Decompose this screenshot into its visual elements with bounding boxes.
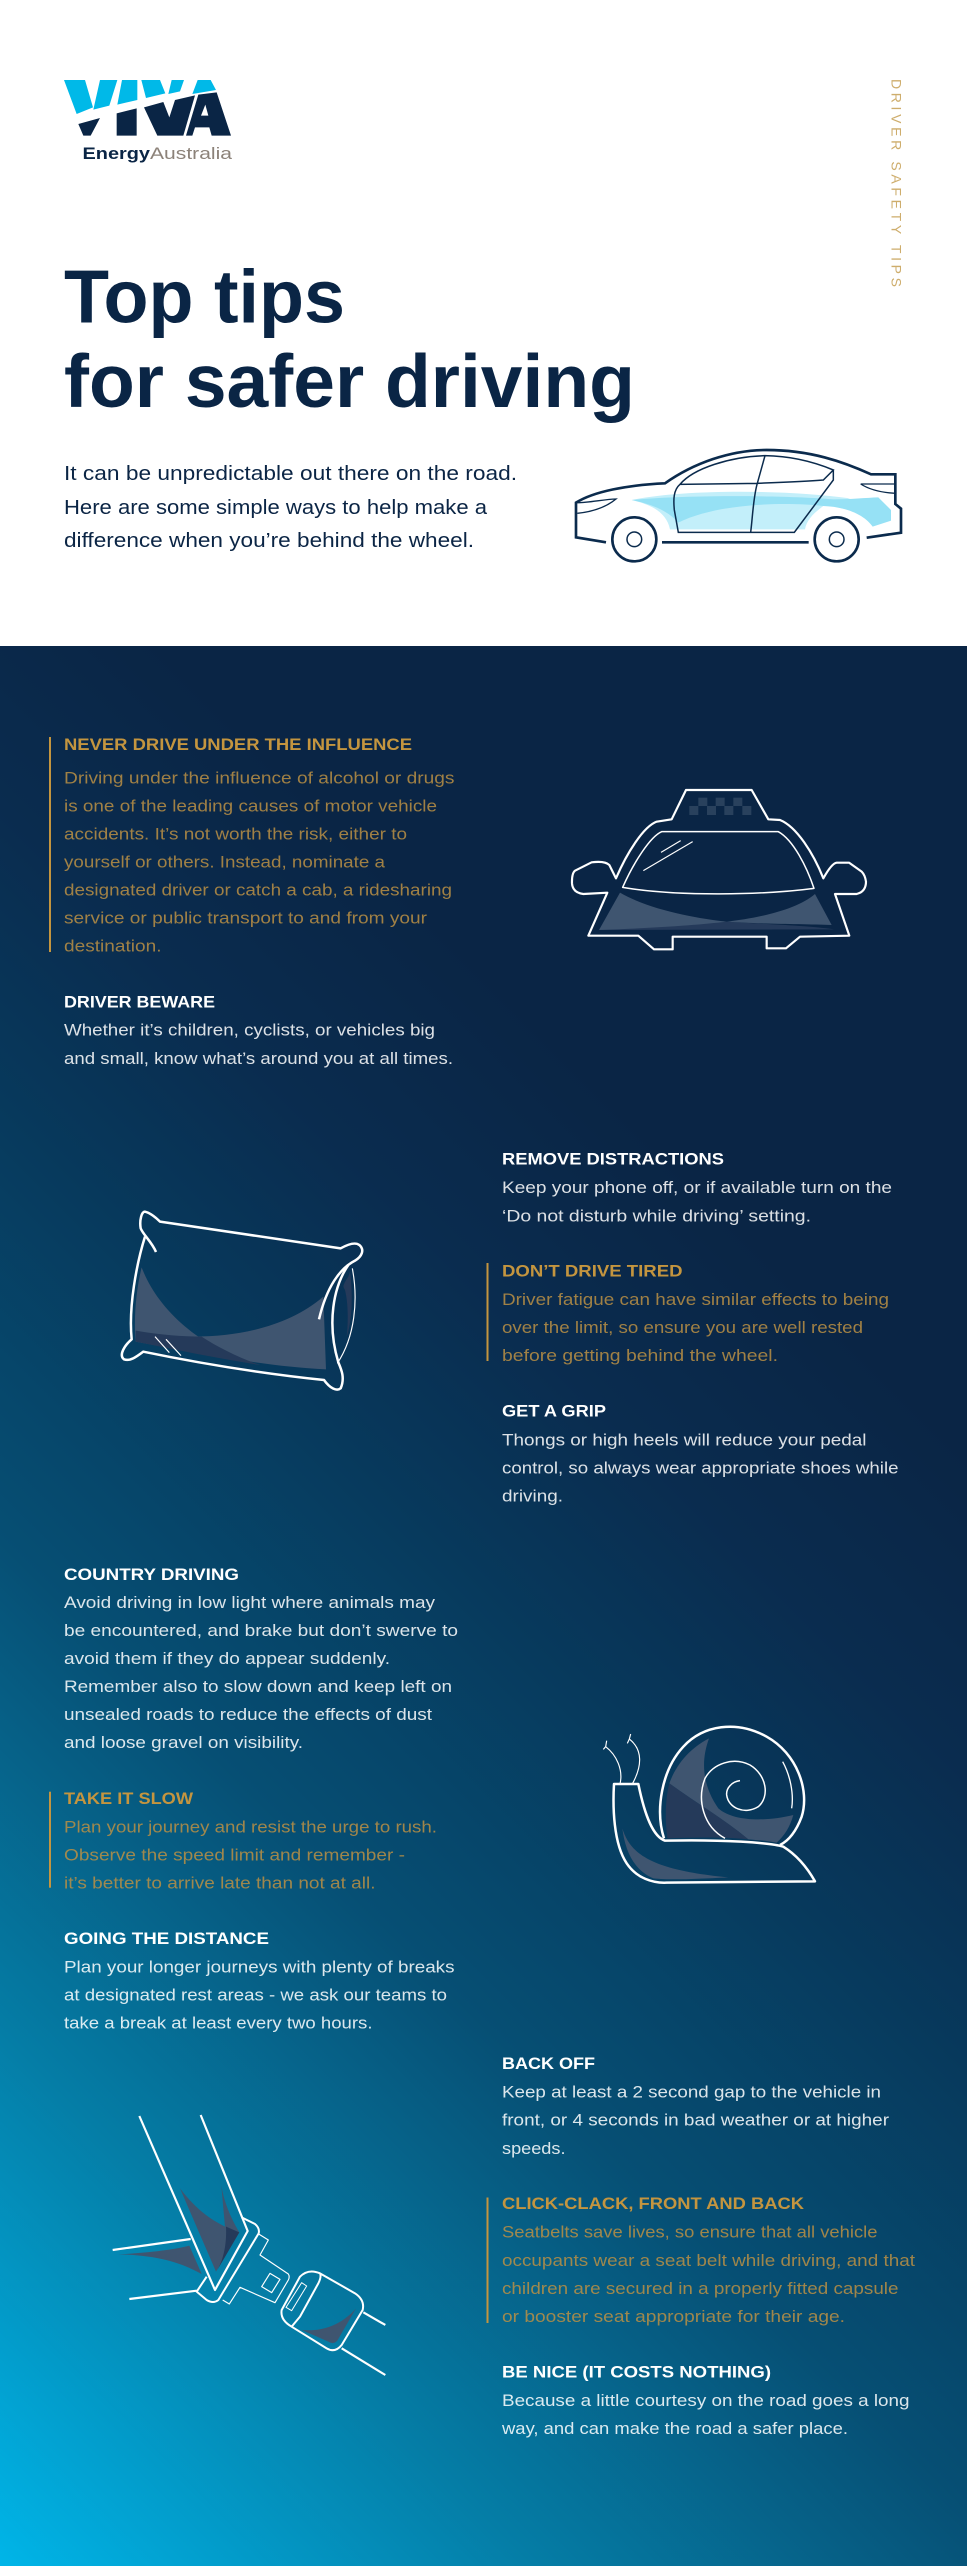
tip: click-clack, front and back: occupants wear a seat belt while driving, and that [502, 2251, 915, 2270]
tip: back off [502, 2054, 889, 2158]
icon: seatbelt [113, 2115, 385, 2375]
icon: pillow [122, 1212, 362, 1390]
tip: going the distance: Plan your longer journeys with plenty of breaks [64, 1958, 454, 1977]
tip: click-clack, front and back: children are secured in a properly fitted capsule [502, 2279, 898, 2298]
tip: remove distractions [502, 1149, 892, 1225]
icon: taxi [572, 790, 866, 949]
tip: take it slow: it’s better to arrive late than not at all. [64, 1874, 376, 1893]
tip: take it slow: Observe the speed limit and remember - [64, 1846, 405, 1865]
tip: get a grip [502, 1402, 898, 1505]
tip: going the distance: at designated rest areas - we ask our teams to [64, 1986, 447, 2005]
tip: driver beware: and small, know what’s around you at all times. [64, 1049, 453, 1068]
panel: white header [0, 0, 967, 646]
tip: country driving: unsealed roads to reduce the effects of dust [64, 1705, 432, 1724]
tip: driver beware: Whether it’s children, cyclists, or vehicles big [64, 1021, 435, 1040]
tip: click-clack, front and back: or booster seat appropriate for their age. [502, 2307, 845, 2326]
tip: don't drive tired: before getting behind the wheel. [502, 1346, 778, 1365]
tip: country driving: Avoid driving in low light where animals may [64, 1593, 436, 1612]
tip: country driving: be encountered, and brake but don’t swerve to [64, 1621, 458, 1640]
tip: remove distractions: Keep your phone off, or if available turn on the [502, 1178, 892, 1197]
tip: never drive under the influence: designated driver or catch a cab, a ridesharing [64, 880, 452, 899]
tip: going the distance: take a break at least every two hours. [64, 2014, 372, 2033]
tip: never drive under the influence [49, 735, 454, 956]
logo: Viva Energy Australia: Australia [150, 144, 233, 163]
title [64, 254, 635, 423]
tip: be nice [501, 2363, 910, 2438]
tip: never drive under the influence: accidents. It’s not worth the risk, either to [64, 824, 407, 843]
tip: never drive under the influence: NEVER DRIVE UNDER THE INFLUENCE [64, 735, 412, 754]
icon: snail [603, 1727, 815, 1883]
tip: never drive under the influence: Driving under the influence of alcohol or drugs [64, 768, 454, 787]
title: for safer driving [64, 339, 635, 423]
tip: click-clack, front and back: Seatbelts save lives, so ensure that all vehicle [502, 2222, 878, 2242]
tip: back off: Keep at least a 2 second gap to the vehicle in [502, 2082, 881, 2101]
tip: remove distractions: ‘Do not disturb while driving’ setting. [502, 1206, 811, 1225]
tip: never drive under the influence: service or public transport to and from your [64, 908, 427, 927]
tip: country driving: Remember also to slow down and keep left on [64, 1677, 452, 1696]
tip: get a grip: control, so always wear appropriate shoes while [502, 1458, 898, 1477]
tip: take it slow [49, 1789, 437, 1893]
panel: gradient tips background [0, 646, 967, 2566]
tip: going the distance [64, 1929, 454, 2033]
tip: never drive under the influence: yourself or others. Instead, nominate a [64, 852, 386, 871]
tip: back off: speeds. [502, 2139, 566, 2158]
tip: get a grip: GET A GRIP [502, 1402, 606, 1421]
logo: Viva Energy Australia [64, 80, 233, 163]
tip: remove distractions: REMOVE DISTRACTIONS [502, 1149, 724, 1168]
intro text: It can be unpredictable out there on the road. [64, 463, 517, 485]
tip: take it slow: Plan your journey and resist the urge to rush. [64, 1818, 437, 1837]
tip: don't drive tired [486, 1262, 889, 1365]
tip: get a grip: Thongs or high heels will reduce your pedal [502, 1430, 866, 1449]
tip: click-clack, front and back [486, 2194, 915, 2326]
vertical label: driver safety tips: DRIVER SAFETY TIPS [888, 79, 904, 287]
tip: be nice: BE NICE (IT COSTS NOTHING) [502, 2363, 771, 2382]
tip: country driving: COUNTRY DRIVING [64, 1565, 239, 1584]
logo: Viva Energy Australia: Energy [82, 144, 151, 163]
tip: be nice: way, and can make the road a safer place. [501, 2419, 848, 2438]
tip: country driving: and loose gravel on visibility. [64, 1733, 303, 1752]
tip: get a grip: driving. [502, 1486, 563, 1505]
tip: click-clack, front and back: CLICK-CLACK, FRONT AND BACK [502, 2194, 805, 2213]
intro text [64, 463, 517, 552]
title: Top tips [64, 254, 345, 338]
tip: take it slow: TAKE IT SLOW [64, 1789, 194, 1808]
tip: never drive under the influence: is one of the leading causes of motor vehicle [64, 796, 437, 815]
tip: country driving: avoid them if they do appear suddenly. [64, 1649, 390, 1668]
tip: don't drive tired: over the limit, so ensure you are well rested [502, 1318, 863, 1337]
tip: be nice: Because a little courtesy on the road goes a long [502, 2391, 910, 2410]
tip: don't drive tired: DON’T DRIVE TIRED [502, 1262, 682, 1281]
tip: never drive under the influence: destination. [64, 937, 162, 956]
tip: driver beware [64, 992, 453, 1068]
tip: back off: BACK OFF [502, 2054, 595, 2073]
intro text: difference when you’re behind the wheel. [64, 530, 474, 552]
tip: driver beware: DRIVER BEWARE [64, 992, 215, 1011]
icon: car [576, 450, 901, 561]
tip: don't drive tired: Driver fatigue can have similar effects to being [502, 1290, 889, 1309]
tip: going the distance: GOING THE DISTANCE [64, 1929, 269, 1948]
intro text: Here are some simple ways to help make a [64, 497, 488, 519]
tip: back off: front, or 4 seconds in bad weather or at higher [502, 2111, 889, 2130]
tip: country driving [64, 1565, 458, 1752]
